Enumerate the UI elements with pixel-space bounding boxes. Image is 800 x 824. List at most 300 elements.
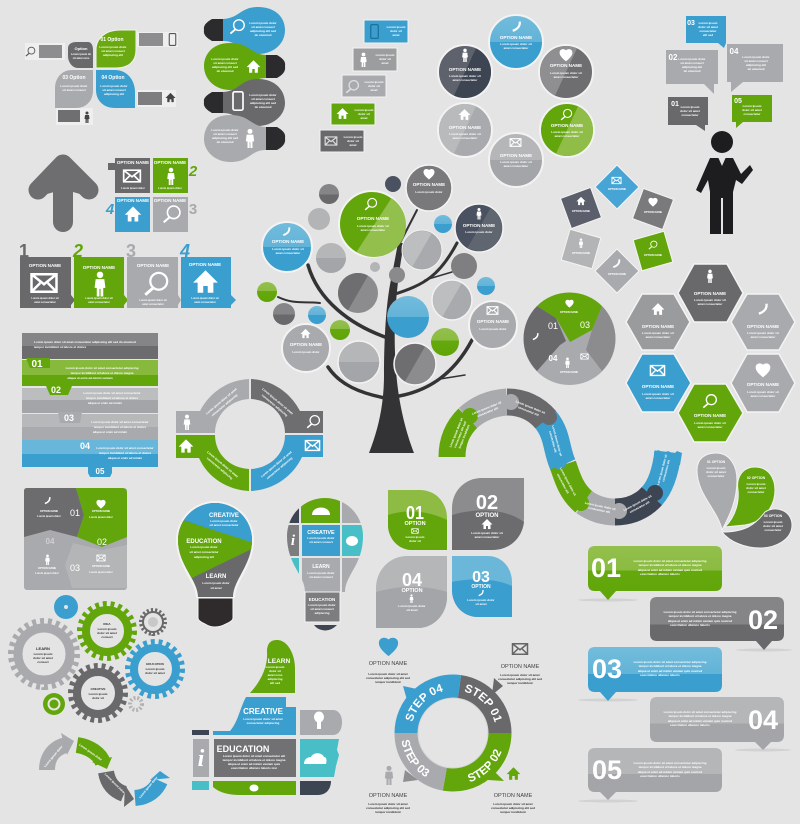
petal 02 dark: Lorem ipsum dolor sit	[471, 531, 503, 535]
numbered speech boxes	[578, 546, 792, 802]
step label: home option: tempor incididunt	[500, 810, 526, 814]
band: blue 05: tempor incididunt ut labore et dolore	[99, 451, 151, 455]
bulb 2 labels and icons	[291, 508, 358, 579]
hexagon: green search: OPTION NAME	[694, 413, 726, 418]
step label: heart option: OPTION NAME	[369, 661, 408, 667]
step label: mail option: tempor incididunt	[507, 681, 533, 685]
thumb: gray bulb tile	[300, 710, 342, 735]
section: lower labels	[35, 537, 127, 588]
bubble 02 gray: sit amet consect	[680, 61, 704, 65]
box 03 blue	[578, 647, 722, 702]
bubble 04 gray: do eiusmod	[748, 67, 765, 71]
bulb: green home: do eiusmod	[217, 69, 234, 73]
ring: step 01 segment	[460, 678, 503, 733]
diamond: green search: OPTION NAME	[644, 253, 662, 257]
leaf: person option	[455, 204, 510, 259]
step label: person option	[366, 766, 410, 814]
hexagon: green search: Lorem ipsum dolor sit	[694, 421, 726, 425]
bubble 03 blue: Lorem ipsum	[699, 21, 718, 25]
box 01 green: aliqua ut enim ad minim veniam quis nostrud	[638, 568, 702, 572]
bubble 02 gray: 02	[669, 53, 678, 62]
hexagon: blue mail: OPTION NAME	[642, 384, 674, 389]
trunk and branches	[278, 210, 472, 453]
bulb: blue search	[204, 7, 285, 54]
box 02 dark: tempor incididunt ut labore et dolore magna	[669, 614, 732, 618]
petal: dark 02: sit amet cons	[73, 56, 90, 60]
circle: gray home: OPTION NAME	[449, 125, 481, 130]
bubble 05 green	[732, 95, 772, 128]
card: gray person: amet	[381, 61, 389, 65]
pie: green sector: OPTION NAME	[560, 310, 578, 314]
petal: blue 04	[96, 70, 135, 108]
thumb: education panel: EDUCATION	[217, 744, 269, 754]
ribbon: segment green	[452, 418, 468, 457]
section: lower labels: 04	[46, 537, 55, 546]
bubble 04 gray: adipiscing elit	[746, 63, 766, 67]
step label: person option: tempor incididunt	[375, 810, 401, 814]
box 04 gray: aliqua ut enim ad minim veniam quis nostrud	[668, 719, 732, 723]
bulb 2 labels and icons: Lorem ipsum dolor	[307, 571, 335, 575]
circle: gray home: amet consectetur	[453, 136, 478, 140]
bulb 1 labels: EDUCATION	[186, 539, 222, 545]
teardrop: green: 02 OPTION	[747, 476, 766, 480]
bulb: blue search: Lorem ipsum dolor	[249, 21, 277, 25]
circle: blue phone: OPTION NAME	[500, 35, 532, 40]
option 2: green person	[153, 158, 198, 193]
section: green top right: 02	[97, 537, 107, 547]
band: dark 01: Lorem ipsum dolor sit amet consectetur adipiscing elit sed do eiusmod	[34, 340, 136, 344]
section: lower labels: OPTION NAME	[92, 564, 110, 568]
quadrant ring	[176, 379, 323, 491]
card: blue tablet: Lorem ipsum	[387, 25, 406, 29]
band: green 02: tempor incididunt ut labore et dolore magna	[71, 371, 134, 375]
hexagon: blue mail: amet consectetur	[646, 396, 671, 400]
hexagon: green search: amet consectetur	[698, 425, 723, 429]
tab 1: dark mail	[19, 241, 75, 308]
section: dark top left	[24, 488, 84, 537]
ring: step labels: STEP 01	[464, 684, 502, 722]
box 01 green: exercitation ullamco laboris	[640, 572, 680, 576]
bulb 2 labels and icons: Lorem ipsum dolor	[307, 536, 335, 540]
hexagon: gray phone: OPTION NAME	[747, 324, 779, 329]
box 02 dark: Lorem ipsum dolor sit amet consectetur adipiscing	[664, 610, 737, 614]
petal: light gray 03: 03 Option	[62, 75, 86, 81]
ribbon text lines: consectetur elit	[588, 506, 610, 514]
option 1: dark mail: Lorem ipsum dolor	[121, 186, 145, 190]
hexagon: dark person: Lorem ipsum dolor sit	[694, 298, 726, 302]
teardrop trio	[697, 453, 792, 548]
thumb: green learn: elit sed	[270, 681, 280, 685]
quadrant: dark search: consectetur adipiscing	[261, 393, 289, 417]
box 05 gray: aliqua ut enim ad minim veniam quis nostrud	[638, 770, 702, 774]
hexagon: gray phone	[731, 294, 795, 350]
bulb: blue search: adipiscing elit sed	[250, 29, 276, 33]
leaf: home option	[282, 324, 330, 372]
bulb 2 labels and icons: CREATIVE	[307, 530, 335, 536]
tab 4: blue home: amet consectetur	[194, 300, 216, 304]
ribbon: segment light gray	[468, 402, 507, 418]
thumb: green learn: LEARN	[268, 658, 290, 665]
box 04 gray	[650, 697, 791, 752]
petal 04 gray: 04	[402, 570, 422, 590]
ring: step labels	[402, 684, 502, 782]
ribbon text lines: Lorem ipsum dolor sit	[515, 399, 546, 415]
circle: navy person: OPTION NAME	[449, 67, 481, 72]
band: green 02: Lorem ipsum dolor sit amet consectetur adipiscing	[66, 366, 139, 370]
tab 3: gray search: 3	[126, 241, 136, 261]
leaf: gray small circles	[273, 176, 477, 325]
numbered tall options row	[19, 241, 236, 308]
petal 02 dark: amet consectetur	[475, 535, 500, 539]
light bulb stack	[204, 7, 285, 162]
step label: person option: OPTION NAME	[369, 793, 408, 799]
band: blue 05: aliqua ut enim ad minim	[108, 456, 142, 460]
leaf: green search: Lorem ipsum dolor sit	[357, 224, 389, 228]
light bulb with three bands	[176, 501, 254, 628]
band: green 02	[22, 360, 158, 395]
teardrop: dark: Lorem ipsum	[764, 520, 783, 524]
gear: blue education: EDUCATION	[146, 662, 164, 666]
teardrop: gray: Lorem ipsum	[707, 466, 726, 470]
leaf: large gray circles	[331, 266, 472, 385]
bulb 2 education base	[305, 592, 340, 630]
circle: dark heart: amet consectetur	[554, 75, 579, 79]
box 01 green: tempor incididunt ut labore et dolore magna	[639, 563, 702, 567]
thumb: green learn: dolor sit	[269, 669, 281, 673]
petal 04 gray: Lorem ipsum dolor	[398, 604, 426, 608]
card: dark mail: dolor sit	[347, 139, 359, 143]
bubble 05 green: dolor sit amet	[742, 108, 762, 112]
petal: green 01: sit amet consect	[101, 49, 125, 53]
ribbon text lines: Lorem ipsum dolor sit	[448, 417, 464, 448]
ribbon text lines: Lorem ipsum dolor sit	[559, 467, 577, 496]
step label: home option: OPTION NAME	[494, 793, 533, 799]
band: blue 05: Lorem ipsum dolor sit amet consectetur	[96, 446, 154, 450]
band: light gray 04: tempor incididunt ut labore et dolore	[94, 425, 146, 429]
quadrant: blue mail: consectetur adipiscing	[266, 456, 293, 480]
tab 3: gray search: Lorem ipsum dolor sit	[139, 298, 167, 302]
thumb: green learn: Lorem ipsum	[266, 665, 285, 669]
thumb: blue creative: consectetur adipiscing	[247, 721, 279, 725]
step label: mail option: OPTION NAME	[501, 664, 540, 670]
gear: gray learn: dolor sit amet	[33, 656, 53, 660]
quadrant: gray person	[176, 379, 249, 433]
hexagon: dark person	[678, 264, 743, 322]
hexagon: gray phone: Lorem ipsum dolor sit	[747, 331, 779, 335]
leaf: blue phone	[262, 222, 312, 272]
teardrop: dark: dolor sit amet	[763, 524, 783, 528]
bulb 2 labels and icons: sit amet consect	[309, 540, 333, 544]
bubble 01 dark: dolor sit amet	[680, 109, 700, 113]
box 04 gray: exercitation ullamco laboris	[670, 723, 710, 727]
circle: green search	[540, 103, 602, 165]
teardrop: gray	[697, 453, 737, 530]
petal 02 dark: 02	[476, 492, 498, 514]
thumb: education panel: tempor incididunt ut labore et dolore magna	[223, 758, 286, 762]
teardrop: dark	[722, 509, 792, 548]
pie: base sectors	[524, 293, 616, 385]
thumb: blue creative	[213, 697, 296, 735]
hexagon: gray home	[626, 294, 690, 350]
bubble 04 gray: sit amet consect	[744, 59, 768, 63]
ring: step 02 segment	[445, 733, 504, 781]
tab 2: green person: Lorem ipsum dolor sit	[85, 296, 113, 300]
bulb: blue search: sit amet consect	[251, 25, 275, 29]
teardrop: green: consectetur	[747, 490, 765, 494]
ribbon text lines: tempor incididunt	[457, 424, 471, 449]
gear: tiny gray	[130, 698, 142, 710]
thumb: education panel: aliqua ut enim ad minim veniam quis	[228, 762, 280, 766]
petal: green 01	[96, 30, 136, 68]
card: dark mail: Lorem ipsum	[344, 135, 363, 139]
ribbon: segment blue end	[652, 452, 668, 496]
bulb 1 colored bands	[178, 503, 252, 597]
circle: navy person: Lorem ipsum dolor sit	[449, 74, 481, 78]
ribbon: segment dark	[507, 402, 546, 420]
gear: blue education: dolor sit amet	[145, 671, 165, 675]
bubble 05 green: consectetur	[743, 112, 761, 116]
circle: blue phone	[489, 15, 543, 69]
leaf: person option: Lorem ipsum dolor	[465, 230, 493, 234]
section: lower labels: OPTION NAME	[38, 566, 56, 570]
step label: mail option: Lorem ipsum dolor sit amet	[500, 673, 540, 677]
band: blue 05	[22, 440, 158, 477]
bulb 1 labels: Lorem ipsum dolor	[190, 545, 218, 549]
ribbon text lines: consectetur elit	[629, 500, 650, 514]
card: blue tablet: dolor sit	[390, 29, 402, 33]
thumb: blue creative: CREATIVE	[243, 707, 284, 716]
bubble 01 dark: consectetur	[681, 113, 699, 117]
bulb 2 labels and icons: sit amet consect	[309, 575, 333, 579]
petal 04 gray: OPTION	[401, 588, 423, 594]
box 03 blue: 03	[592, 654, 622, 684]
circle: navy person: amet consectetur	[453, 78, 478, 82]
bulb: gray person: sit amet consect	[213, 132, 237, 136]
petal 03 blue: Lorem ipsum dolor	[467, 598, 495, 602]
leaf: green search: amet consectetur	[361, 228, 386, 232]
bubble 03 blue: elit sed	[703, 33, 713, 37]
bulb: dark tablet: Lorem ipsum dolor	[249, 93, 277, 97]
bubble 04 gray: Lorem ipsum dolor	[742, 55, 770, 59]
gear: green idea	[80, 604, 134, 658]
petal 02 dark	[452, 478, 524, 550]
tab 1: dark mail: 1	[19, 241, 29, 261]
option 4: blue home: OPTION NAME	[117, 198, 149, 203]
section: dark top left: Lorem ipsum dolor	[37, 514, 61, 518]
gear: gray learn: LEARN	[36, 646, 50, 651]
gear: dark creative: dolor sit	[92, 696, 104, 700]
gear: dark creative	[71, 666, 125, 720]
box 03 blue: tempor incididunt ut labore et dolore magna	[639, 664, 702, 668]
bubble 05 green: 05	[734, 98, 742, 105]
ribbon: segment green lower	[563, 465, 584, 502]
numbered square options	[105, 158, 198, 232]
hexagon: gray home: OPTION NAME	[642, 324, 674, 329]
tab 3: gray search	[126, 241, 181, 308]
bubble 01 dark	[668, 97, 708, 131]
curved arrows	[43, 733, 170, 807]
leaf: heart option: OPTION NAME	[413, 182, 445, 187]
ring: step 04 segment	[403, 686, 460, 733]
thumb: green learn	[250, 640, 295, 693]
leaf: mail option: OPTION NAME	[477, 319, 509, 324]
hexagon cluster	[626, 264, 795, 442]
bulb 1 labels	[186, 513, 239, 590]
arrow: dark: Lorem ipsum dolor	[104, 772, 126, 795]
leaf: blue phone: OPTION NAME	[272, 239, 304, 244]
tab 2: green person: OPTION NAME	[83, 265, 115, 270]
circle: navy person	[438, 45, 500, 107]
tab 4: blue home: 4	[179, 241, 190, 261]
step label: home option: consectetur adipiscing elit sed	[491, 806, 535, 810]
ring: step labels: STEP 03	[402, 740, 430, 776]
step label: mail option: consectetur adipiscing elit sed	[498, 677, 542, 681]
section: green top right: Lorem ipsum dolor	[89, 515, 113, 519]
band: dark 01: 01	[31, 359, 43, 370]
section: green top right	[76, 488, 127, 547]
section: dark top left: OPTION NAME	[40, 509, 58, 513]
ribbon text lines: consectetur elit	[548, 431, 558, 453]
card: green home: dolor sit	[358, 112, 370, 116]
section: lower labels: Lorem ipsum dolor	[35, 571, 59, 575]
petal 03 blue	[452, 556, 512, 617]
thumb: education panel: exercitation ullamco laboris nisi	[231, 766, 277, 770]
bulb 1 outline	[176, 501, 254, 598]
gear: green idea: dolor sit amet	[97, 631, 117, 635]
section: lower gray base	[24, 488, 127, 590]
label: top right with phone icon	[137, 32, 178, 47]
petal set with side labels	[25, 30, 178, 125]
step label: heart option: tempor incididunt	[375, 680, 401, 684]
tree of circles	[257, 165, 517, 453]
ribbon text lines: consectetur elit	[661, 460, 671, 482]
petal: blue 04: sit amet consect	[102, 88, 126, 92]
card: dark mail: amet	[349, 143, 357, 147]
quadrant: blue mail	[251, 435, 323, 491]
bubble 01 dark: 01	[671, 101, 679, 108]
option 1: dark mail	[108, 158, 150, 193]
card: gray search	[342, 75, 386, 97]
box 04 gray: Lorem ipsum dolor sit amet consectetur adipiscing	[664, 710, 737, 714]
gear: gray learn	[11, 621, 77, 687]
bulb 1 labels: Lorem ipsum dolor	[202, 581, 230, 585]
bulb 2 education base: sit amet consect	[310, 607, 334, 611]
box 05 gray: Lorem ipsum dolor sit amet consectetur adipiscing	[634, 761, 707, 765]
bulb 2 education base: Lorem ipsum dolor	[308, 603, 336, 607]
bubble 03 blue	[686, 16, 726, 48]
step label: mail option	[498, 644, 542, 685]
bubble 01 dark: Lorem ipsum	[681, 105, 700, 109]
band: light gray 04	[22, 414, 158, 451]
thumb: navy strip	[192, 730, 209, 735]
thumb: green bottom	[213, 781, 296, 795]
bubble 04 gray: 04	[730, 47, 739, 56]
band: blue 05: 05	[96, 467, 105, 476]
bulb 2 labels and icons: LEARN	[312, 564, 330, 570]
option 3: gray search	[153, 197, 197, 232]
arrow: green: Lorem ipsum dolor	[78, 743, 104, 762]
teardrop: dark: 03 OPTION	[764, 514, 783, 518]
bulb: gray person	[204, 115, 285, 162]
quadrant: dark search	[251, 379, 323, 433]
circle: dark heart: Lorem ipsum dolor sit	[550, 71, 582, 75]
card: green home	[331, 103, 375, 125]
label: left with search icon	[25, 43, 65, 60]
thumb: green learn: adipiscing	[268, 677, 283, 681]
thumb: teal tile	[192, 781, 209, 790]
diamond: gray phone: OPTION NAME	[608, 272, 626, 276]
hexagon: gray heart: Lorem ipsum dolor sit	[747, 390, 779, 394]
box 03 blue: exercitation ullamco laboris	[640, 673, 680, 677]
petal: blue 04: 04 Option	[101, 75, 125, 81]
card: gray search: Lorem ipsum	[365, 80, 384, 84]
petal: blue 04: Lorem ipsum dolor	[100, 84, 128, 88]
circle: blue phone: amet consectetur	[504, 46, 529, 50]
bulb: dark tablet: do eiusmod	[255, 105, 272, 109]
leaf: blue phone: Lorem ipsum dolor sit	[272, 247, 304, 251]
bulb: blue search: do eiusmod	[255, 33, 272, 37]
gear: tiny dark with bulb	[141, 610, 165, 634]
petal 01 green	[388, 490, 447, 550]
ribbon text lines: Lorem ipsum dolor sit	[551, 425, 563, 456]
card: gray person: dolor sit	[379, 57, 391, 61]
bubble 02 gray: adipiscing elit	[682, 65, 702, 69]
leaf: mail option: Lorem ipsum dolor	[479, 327, 507, 331]
bulb: green home: adipiscing elit sed	[212, 65, 238, 69]
gear: dark creative: CREATIVE	[91, 687, 105, 691]
bulb: gray person: do eiusmod	[217, 140, 234, 144]
mosaic light bulb	[285, 496, 364, 630]
bulb 1 labels: sit amet consectetur	[189, 550, 219, 554]
bulb 1 labels: sit amet consectetur	[209, 523, 239, 527]
option 1: dark mail: OPTION NAME	[117, 160, 149, 165]
arrow: blue: Lorem ipsum dolor	[138, 775, 159, 799]
box 05 gray: 05	[592, 755, 622, 785]
gear: tiny green recycle	[43, 693, 65, 715]
bulb 1 labels: CREATIVE	[209, 513, 239, 519]
ribbon text lines: consectetur elit sed	[453, 421, 467, 448]
quadrant: green home: consectetur adipiscing	[206, 456, 234, 480]
tab 4: blue home: Lorem ipsum dolor sit	[191, 296, 219, 300]
hexagon: gray heart	[731, 354, 795, 412]
petal 01 green: OPTION	[404, 521, 426, 527]
tab 4: blue home: OPTION NAME	[189, 262, 221, 267]
hexagon: dark person: amet consectetur	[698, 302, 723, 306]
quadrant: blue mail: Lorem ipsum dolor sit amet	[260, 450, 293, 478]
teardrop: gray: dolor sit amet	[706, 470, 726, 474]
diamond: blue mail: OPTION NAME	[608, 187, 626, 191]
bulb 2 education base: adipiscing	[315, 611, 330, 615]
card: blue tablet	[364, 20, 408, 43]
bulb: gray person: Lorem ipsum dolor	[211, 128, 239, 132]
label: lower right with home icon	[137, 90, 176, 107]
bulb 1 labels: LEARN	[206, 574, 226, 580]
leaf: green search	[339, 191, 418, 269]
circle: dark heart: OPTION NAME	[550, 63, 582, 68]
tab 4: blue home	[179, 241, 236, 308]
four leaf petals	[376, 478, 524, 628]
teardrop: dark: consectetur	[764, 528, 782, 532]
petal: dark 02	[68, 42, 93, 68]
gear: dark creative: Lorem ipsum	[89, 692, 108, 696]
label: lower left with person icon	[56, 108, 93, 125]
band: green 02: aliqua ut enim ad minim veniam	[67, 376, 113, 380]
gear: blue education	[128, 642, 182, 696]
thumb: gray info: i	[198, 746, 205, 772]
circle: green search: amet consectetur	[555, 134, 580, 138]
petal: dark 02: Lorem ipsum do	[71, 52, 91, 56]
petal 01 green: 01	[406, 503, 424, 523]
